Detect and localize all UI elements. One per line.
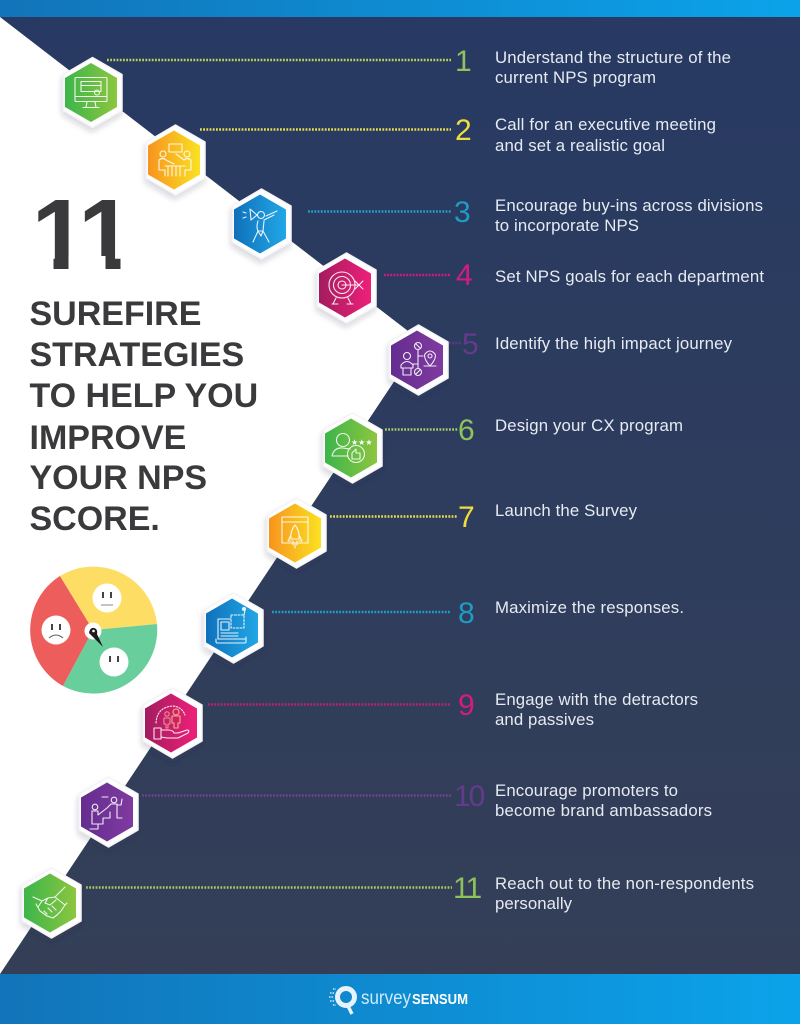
step 9 connector — [208, 703, 451, 706]
step 11 number: 11 — [453, 872, 481, 905]
icon: hand with people — [154, 706, 189, 739]
step 3 connector — [308, 210, 451, 213]
step 2 text: and set a realistic goal — [495, 136, 665, 155]
icon: logo Q mark — [329, 988, 354, 1014]
logo wordmark bold: SENSUM — [412, 992, 468, 1008]
dial pointer — [84, 622, 103, 647]
top bar — [0, 0, 800, 17]
logo wordmark: survey — [361, 988, 411, 1009]
step 11 connector — [86, 886, 452, 889]
step 6 connector — [385, 428, 458, 431]
step 6 text: Design your CX program — [495, 416, 683, 435]
step 5 connector — [449, 342, 462, 344]
icon: happy face — [100, 648, 128, 676]
hexagon 8: laptop icon — [204, 593, 263, 663]
step 10 connector — [142, 794, 451, 797]
step 3 number: 3 — [454, 196, 471, 229]
icon: journey map — [401, 342, 436, 376]
hexagon 1: monitor icon — [64, 58, 122, 128]
step 2 number: 2 — [455, 114, 472, 147]
hexagon 6: rating icon — [324, 413, 382, 483]
title text: SUREFIRE — [30, 295, 201, 333]
footer bar — [0, 974, 800, 1024]
hexagon 11: handshake icon — [22, 868, 81, 938]
step 4 connector — [384, 274, 451, 276]
step 1 text: Understand the structure of the — [495, 48, 731, 67]
icon: neutral face — [92, 584, 122, 612]
step 10 number: 10 — [454, 780, 485, 813]
step 8 number: 8 — [458, 597, 475, 630]
icon: stars: ★★★ — [351, 438, 373, 447]
step 7 text: Launch the Survey — [495, 501, 638, 520]
icon: person with megaphone — [243, 209, 277, 242]
icon: monitor — [75, 78, 107, 108]
step 10 text: become brand ambassadors — [495, 801, 712, 820]
step 4 text: Set NPS goals for each department — [495, 267, 764, 286]
icon: meeting — [159, 144, 191, 176]
step 11 text — [495, 874, 754, 913]
step 9 text — [495, 690, 698, 729]
title text: YOUR NPS — [30, 459, 207, 497]
step 9 number: 9 — [458, 689, 475, 722]
icon: people on stairs — [90, 797, 122, 829]
step 1 connector — [107, 59, 451, 61]
icon: user rating with thumbs up — [332, 434, 364, 462]
logo: SurveySensum — [329, 988, 468, 1014]
title number: 11 — [32, 179, 131, 291]
step 8 text: Maximize the responses. — [495, 598, 684, 617]
step 10 text: Encourage promoters to — [495, 781, 678, 800]
step 9 text: and passives — [495, 710, 594, 729]
step 2 text — [495, 115, 716, 155]
hexagon 9: hand holding people icon — [144, 688, 202, 758]
step 4 number: 4 — [456, 259, 473, 292]
step 7 connector — [330, 515, 458, 518]
icon: rocket in window — [282, 517, 308, 548]
step 2 connector — [200, 128, 451, 131]
step 3 text: Encourage buy-ins across divisions — [495, 196, 763, 215]
pie chart: NPS dial — [30, 567, 157, 694]
step 3 text — [495, 196, 763, 235]
step 6 number: 6 — [458, 414, 475, 447]
step 7 number: 7 — [458, 501, 475, 534]
step 5 text: Identify the high impact journey — [495, 334, 733, 353]
title text: IMPROVE — [30, 419, 186, 457]
step 10 text — [495, 781, 712, 820]
step 2 text: Call for an executive meeting — [495, 115, 716, 134]
icon: target — [329, 272, 363, 304]
hexagon 4: target icon — [318, 253, 376, 323]
title text: STRATEGIES — [30, 336, 244, 374]
step 9 text: Engage with the detractors — [495, 690, 698, 709]
title text — [30, 295, 258, 538]
step 11 text: Reach out to the non-respondents — [495, 874, 754, 893]
title text: SCORE. — [30, 500, 160, 538]
step 1 number: 1 — [455, 45, 472, 78]
step 5 number: 5 — [462, 328, 479, 361]
icon: sad face — [42, 616, 70, 644]
hexagon 3: megaphone person icon — [232, 189, 291, 259]
step 11 text: personally — [495, 894, 573, 913]
hexagon 7: rocket launch icon — [268, 498, 326, 568]
step 3 text: to incorporate NPS — [495, 216, 639, 235]
icon: laptop with responses — [216, 608, 246, 643]
hexagon 2: meeting icon — [146, 125, 205, 195]
title text: TO HELP YOU — [30, 377, 258, 415]
hexagon 10: mentor on stairs icon — [80, 777, 138, 847]
step 1 text — [495, 48, 731, 87]
hexagon 5: journey icon — [390, 325, 448, 395]
step 8 connector — [272, 611, 451, 613]
icon: handshake — [33, 887, 67, 918]
step 1 text: current NPS program — [495, 68, 656, 87]
